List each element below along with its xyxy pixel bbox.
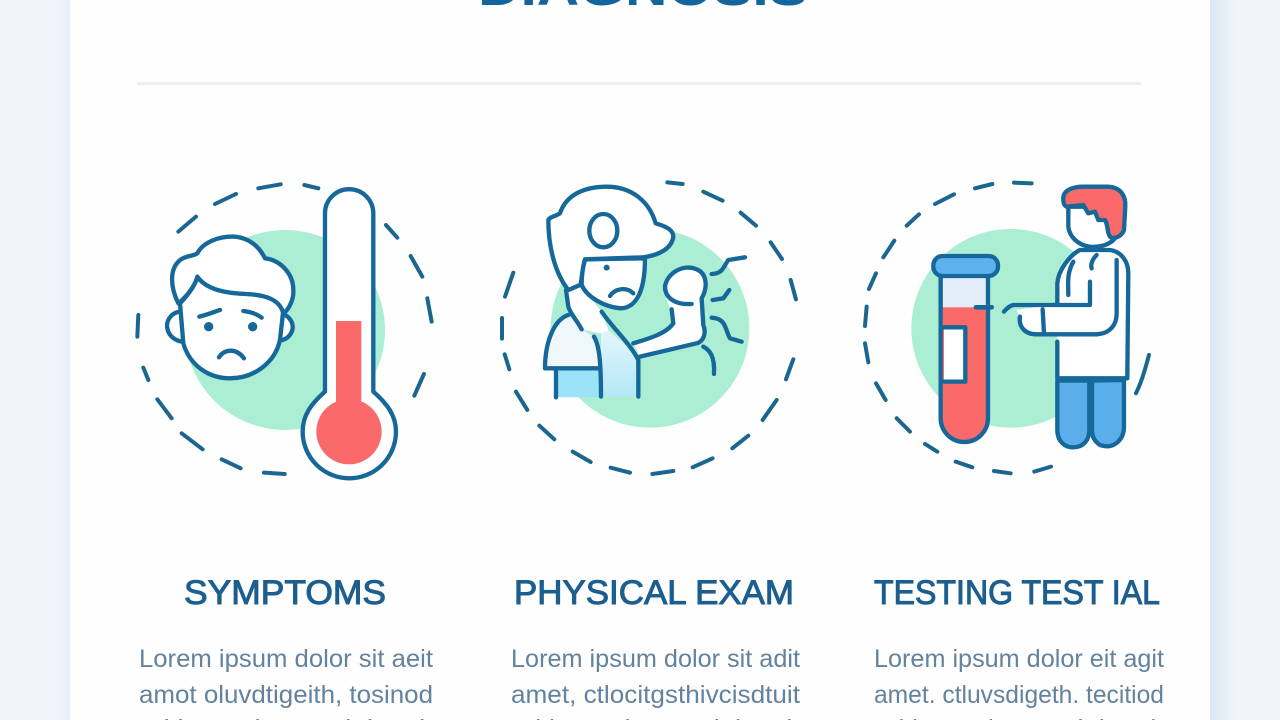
heading: physical exam: PHYSICAL EXAM (514, 574, 794, 612)
icon: test tube (933, 256, 998, 442)
icon: arm and hand (633, 268, 706, 357)
text block: testing: Lorem ipsum dolor eit agit (874, 645, 1164, 673)
icon: thermometer (303, 189, 396, 478)
icon: pain squiggles (703, 257, 745, 374)
text block: physical exam: Lorem ipsum dolor sit adit (511, 645, 800, 673)
text block: testing: amet. ctluvsdigeth. tecitiod (874, 681, 1164, 709)
icon: hair (172, 237, 293, 313)
icon: physical exam doctor and patient (502, 182, 796, 474)
icon: helmet head (582, 258, 645, 308)
icon: clothing (556, 370, 601, 397)
text block: testing (874, 645, 1164, 720)
icon: testing doctor and test tube (865, 183, 1149, 473)
text block: physical exam (511, 645, 800, 720)
heading: symptoms: SYMPTOMS (184, 574, 386, 612)
icon: doctor coat (1017, 250, 1128, 378)
text block: symptoms: amot oluvdtigeith, tosinod (139, 681, 433, 709)
icon: doctor head (1068, 207, 1115, 247)
text block: symptoms (139, 645, 433, 720)
icon: sad face (180, 277, 283, 378)
icon: doctor legs (1057, 381, 1089, 447)
icon: doctor hair (1063, 187, 1125, 238)
text block: physical exam: amet, ctlocitgsthivcisdtuit (511, 681, 800, 709)
icon: ears (167, 312, 293, 342)
icon: symptoms face and thermometer (137, 184, 432, 478)
heading: testing: TESTING TEST IAL (874, 574, 1160, 612)
text block: symptoms: Lorem ipsum dolor sit aeit (139, 645, 433, 673)
